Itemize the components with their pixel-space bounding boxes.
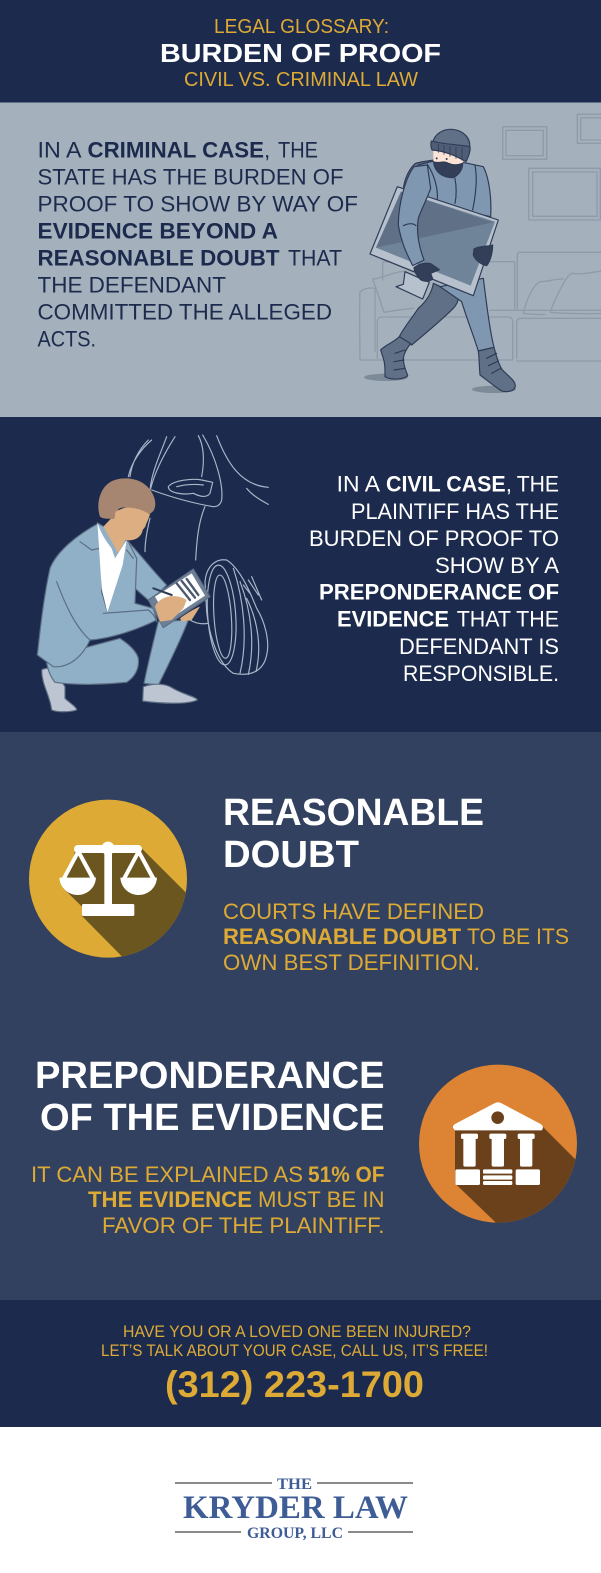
civil case text: EVIDENCE (337, 607, 449, 632)
jacket (37, 523, 157, 667)
shoes (143, 684, 197, 703)
logo: The Kryder Law Group, LLC: THE (277, 1476, 312, 1493)
panel: definitions (0, 732, 601, 1300)
reasonable doubt definition: COURTS HAVE DEFINED (223, 899, 484, 924)
preponderance heading (35, 1055, 384, 1139)
civil case text: BURDEN OF PROOF TO (309, 526, 559, 551)
header overline: LEGAL GLOSSARY: (214, 16, 389, 38)
torso (418, 161, 491, 217)
subtitle: CIVIL VS. CRIMINAL LAW (184, 69, 418, 91)
civil case text: PREPONDERANCE OF (319, 580, 559, 605)
monitor (370, 187, 498, 296)
criminal case text: EVIDENCE BEYOND A (38, 218, 278, 243)
civil case text: PLAINTIFF HAS THE (351, 499, 559, 524)
civil case text: SHOW BY A (435, 553, 559, 578)
beard (433, 162, 463, 178)
civil case text: DEFENDANT IS (399, 634, 559, 659)
call to action text: HAVE YOU OR A LOVED ONE BEEN INJURED? (123, 1322, 471, 1341)
criminal case text: REASONABLE DOUBT (38, 245, 280, 270)
reasonable doubt heading: REASONABLE (223, 792, 484, 834)
arm (398, 165, 431, 266)
thigh (47, 638, 138, 684)
icon: scales of justice (29, 800, 187, 958)
civil case text: IN A (337, 472, 380, 497)
reasonable doubt definition (223, 899, 569, 975)
civil case text: RESPONSIBLE. (403, 661, 559, 686)
preponderance definition: FAVOR OF THE PLAINTIFF. (102, 1213, 384, 1238)
panel: criminal case (0, 102, 601, 417)
left boot (381, 337, 411, 379)
hands (155, 596, 187, 622)
title: BURDEN OF PROOF (160, 38, 441, 68)
preponderance definition: MUST BE IN (258, 1187, 384, 1212)
reasonable doubt definition: REASONABLE DOUBT (223, 924, 461, 949)
call to action text (101, 1322, 488, 1360)
front leg (440, 278, 494, 351)
logo: The Kryder Law Group, LLC: GROUP, LLC (247, 1525, 343, 1542)
criminal case text: COMMITTED THE ALLEGED (38, 299, 332, 324)
icon: courthouse (419, 1064, 577, 1223)
criminal case text: STATE HAS THE BURDEN OF (38, 164, 344, 190)
preponderance definition: IT CAN BE EXPLAINED AS (31, 1162, 303, 1187)
preponderance heading: PREPONDERANCE (35, 1055, 384, 1097)
beanie (433, 129, 470, 149)
criminal case text: PROOF TO SHOW BY WAY OF (38, 192, 358, 216)
criminal case text: IN A (38, 138, 82, 162)
criminal case text (38, 138, 358, 351)
right boot (478, 347, 515, 392)
shirt (97, 522, 127, 612)
criminal case text: THE DEFENDANT (38, 272, 226, 297)
ear (115, 510, 124, 519)
clipboard (148, 569, 210, 628)
preponderance definition: THE EVIDENCE (88, 1187, 252, 1212)
illustration: man inspecting a damaged car wheel (37, 435, 268, 712)
reasonable doubt definition: TO BE ITS (467, 924, 569, 949)
criminal case text: THE (278, 138, 318, 162)
criminal case text: , (264, 138, 270, 162)
face (433, 147, 463, 167)
illustration: burglar carrying a monitor in a living room (360, 114, 601, 393)
phone number: (312) 223-1700 (165, 1364, 424, 1405)
backpack (403, 160, 484, 200)
criminal case text: ACTS. (38, 326, 96, 351)
gloves (414, 263, 439, 281)
civil case text: CIVIL CASE (386, 472, 506, 497)
panel: civil case (0, 417, 601, 732)
hair (98, 478, 155, 519)
front shin (144, 620, 188, 685)
civil case text (309, 472, 559, 686)
back leg (399, 283, 458, 345)
monitor stand (396, 272, 429, 299)
civil case text: THAT THE (457, 607, 559, 632)
reasonable doubt definition: OWN BEST DEFINITION. (223, 950, 480, 975)
preponderance definition: 51% OF (308, 1162, 384, 1187)
logo: The Kryder Law Group, LLC: KRYDER LAW (183, 1490, 408, 1526)
preponderance definition (31, 1162, 384, 1238)
reasonable doubt heading: DOUBT (223, 834, 359, 876)
reasonable doubt heading (223, 792, 484, 876)
call to action text: LET’S TALK ABOUT YOUR CASE, CALL US, IT’S FREE! (101, 1341, 488, 1360)
criminal case text: CRIMINAL CASE (88, 138, 264, 162)
civil case text: , (506, 472, 512, 497)
criminal case text: THAT (288, 245, 342, 270)
logo: The Kryder Law Group, LLC (175, 1476, 413, 1542)
civil case text: THE (517, 472, 559, 497)
neck and face (103, 507, 150, 553)
header panel (0, 0, 601, 102)
preponderance heading: OF THE EVIDENCE (40, 1097, 384, 1139)
footer call to action (0, 1300, 601, 1427)
far arm (128, 542, 167, 602)
